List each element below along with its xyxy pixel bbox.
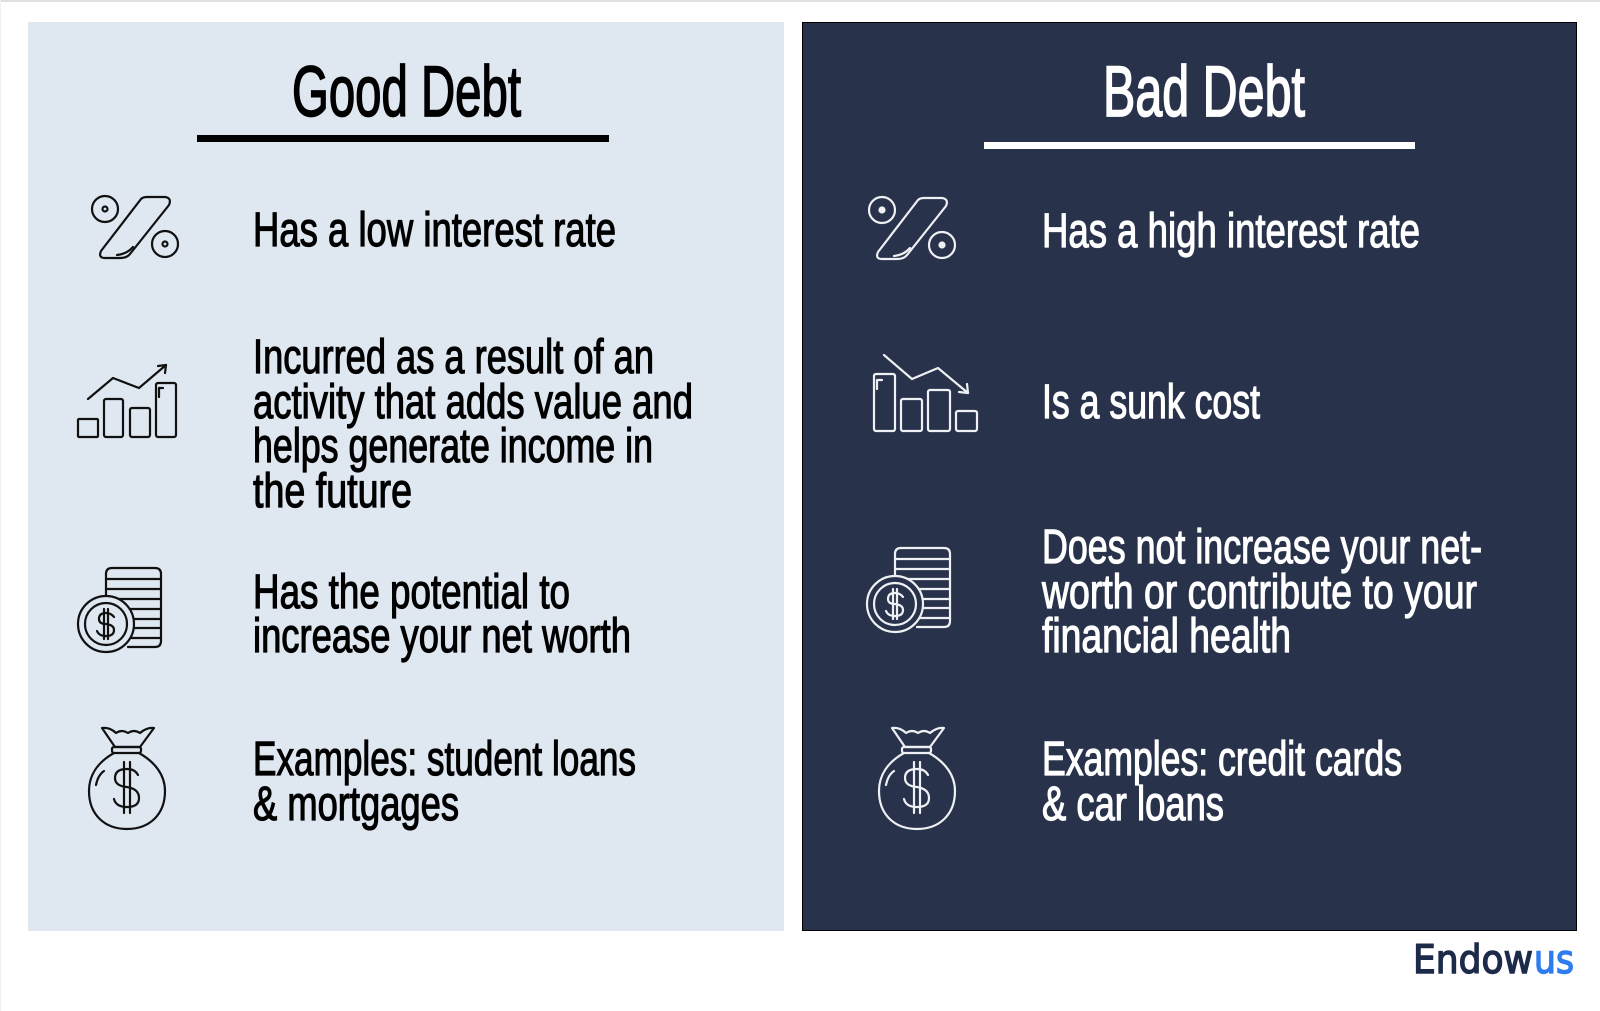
text: examples good debt: & mortgages <box>253 778 459 831</box>
text: potential to increase net worth: Has the potential to <box>253 566 570 619</box>
heading underline: bad debt <box>984 142 1415 149</box>
logo: Endowus: Endow <box>1413 938 1533 983</box>
text: incurred as a result: the future <box>253 465 412 518</box>
text: examples bad debt: Examples: credit cards <box>1042 733 1402 786</box>
text: incurred as a result: Incurred as a result of an <box>253 331 654 384</box>
text: sunk cost: Is a sunk cost <box>1042 376 1260 429</box>
heading: bad debt: Bad Debt <box>1103 53 1305 132</box>
icon: coins stack <box>867 548 950 632</box>
text: examples good debt: Examples: student loans <box>253 733 636 786</box>
panel: bad debt <box>802 22 1576 930</box>
icon: percent <box>869 197 955 259</box>
text: incurred as a result: activity that adds value and <box>253 376 693 429</box>
heading underline: good debt <box>197 135 609 142</box>
text: potential to increase net worth <box>253 566 631 663</box>
logo: Endowus: us <box>1534 938 1574 983</box>
icon: coins stack <box>78 568 161 652</box>
icon: money bag <box>879 728 955 829</box>
text: examples bad debt: & car loans <box>1042 778 1224 831</box>
text: examples bad debt <box>1042 733 1402 831</box>
text: examples good debt <box>253 733 636 831</box>
icon: money bag <box>89 728 165 829</box>
text: does not increase net worth: worth or contribute to your <box>1041 566 1477 619</box>
text: high interest rate: Has a high interest rate <box>1042 205 1420 258</box>
heading: good debt: Good Debt <box>292 53 521 132</box>
text: does not increase net worth: financial health <box>1042 610 1291 663</box>
icon: rising bar chart <box>78 365 176 437</box>
text: low interest rate: Has a low interest rate <box>253 204 616 257</box>
icon: percent <box>92 196 178 258</box>
panel: good debt <box>28 22 784 931</box>
icon: falling bar chart <box>874 355 977 431</box>
text: incurred as a result <box>253 331 693 518</box>
text: does not increase net worth <box>1041 521 1482 663</box>
text: potential to increase net worth: increase your net worth <box>253 610 631 663</box>
text: incurred as a result: helps generate income in <box>253 420 653 473</box>
